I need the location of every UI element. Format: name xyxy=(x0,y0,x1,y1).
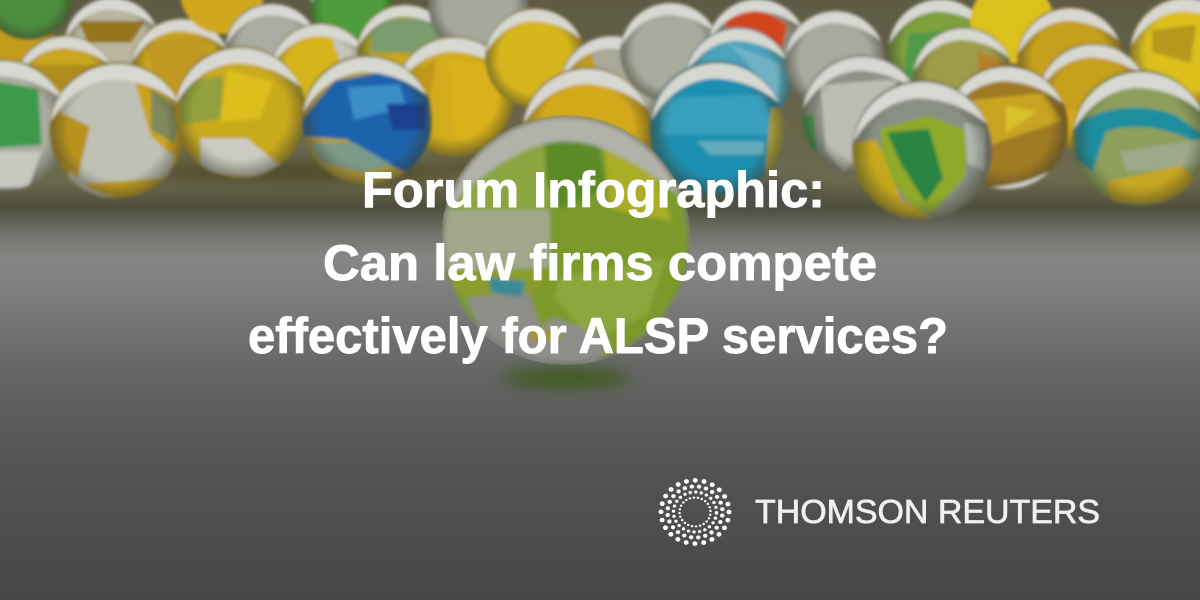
marble: top green xyxy=(0,0,73,40)
marble: back green yellow xyxy=(355,2,440,67)
marble: back yellow far left xyxy=(0,27,56,64)
marble: top yellow bright xyxy=(970,0,1054,64)
marble: back white right of center xyxy=(560,34,656,120)
marble: back white xyxy=(224,1,312,56)
marble: back white right xyxy=(785,10,885,110)
marble: back green top xyxy=(887,0,974,82)
marble: yellow green teal xyxy=(912,26,1012,90)
marble: back amber xyxy=(130,16,228,96)
marble: white glass xyxy=(802,55,922,175)
logo: Thomson Reuters xyxy=(661,480,1100,544)
wordmark: THOMSON REUTERS xyxy=(755,493,1100,530)
marble: orange xyxy=(708,0,802,56)
marble: large central green marble xyxy=(441,115,691,365)
marble: back beige xyxy=(64,0,157,66)
marble: back amber right xyxy=(1015,6,1124,78)
marble: white yellow xyxy=(49,62,185,198)
marble: blue xyxy=(302,55,432,185)
marble: yellow center left xyxy=(394,36,514,156)
marble: teal xyxy=(650,61,784,195)
icon: dotted circle xyxy=(661,480,729,544)
marble: yellow green xyxy=(174,46,306,178)
marble: top yellow xyxy=(180,0,264,34)
marble: light teal xyxy=(687,24,792,110)
marble: top green 2 xyxy=(309,0,394,41)
marble: right amber xyxy=(1038,43,1148,153)
marble: back yellow xyxy=(18,34,109,94)
title line 1: Forum Infographic: xyxy=(362,162,825,218)
marble: teal green xyxy=(1072,70,1200,206)
marble: back yellow white xyxy=(274,21,360,101)
marble: yellow behind main xyxy=(521,66,652,148)
marbles: background and middle rows xyxy=(0,0,1200,158)
table shadows xyxy=(130,159,820,388)
marble: back white top xyxy=(427,0,530,46)
marble: far right yellow xyxy=(1130,0,1200,107)
title line 2: Can law firms compete xyxy=(323,235,877,291)
title line 3: effectively for ALSP services? xyxy=(248,308,948,364)
marble: back yellow center xyxy=(485,8,585,108)
marble: back white center xyxy=(620,2,720,102)
title xyxy=(248,162,948,364)
marble: yellow amber xyxy=(944,65,1068,193)
marble: green far left xyxy=(0,59,68,191)
marbles: front row xyxy=(0,46,1200,220)
marble: green yellow glass xyxy=(852,80,992,220)
